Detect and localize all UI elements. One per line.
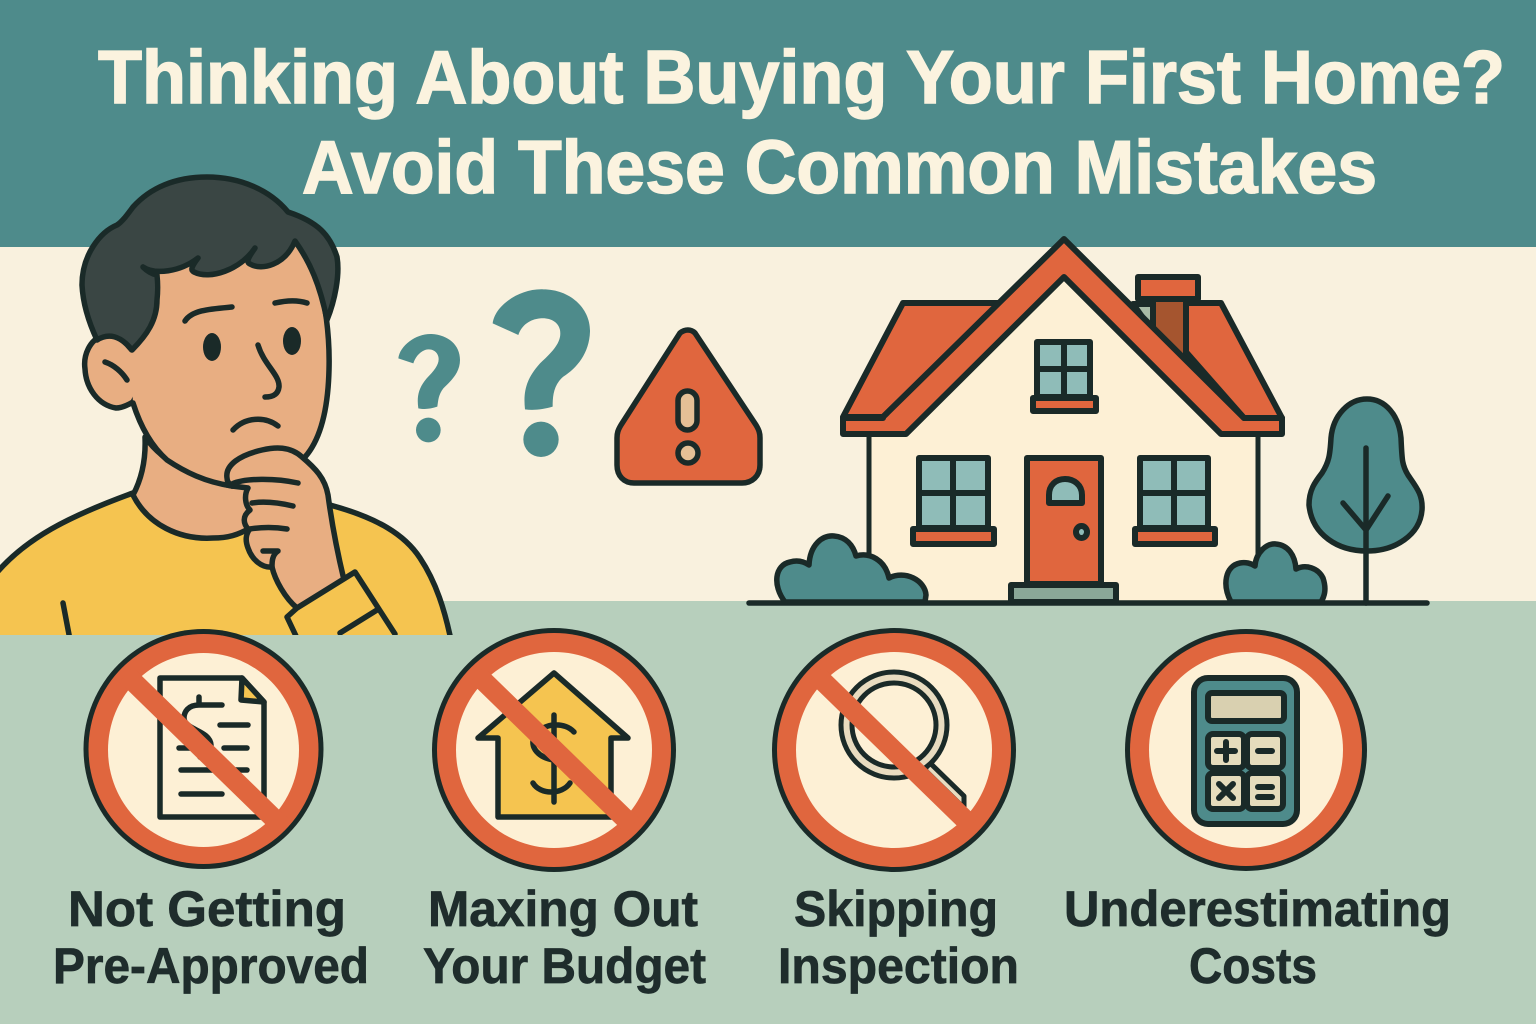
label: not getting pre-approved: Pre-Approved — [53, 938, 369, 994]
label: skipping inspection — [778, 881, 1019, 994]
prohibition slash — [126, 674, 281, 826]
person: hand — [227, 448, 344, 608]
illustration: left bush — [777, 536, 926, 602]
person: neck — [133, 437, 252, 538]
person: jaw and face outline — [131, 310, 332, 489]
house: left window — [913, 458, 994, 544]
house: wall — [869, 277, 1258, 601]
house: door — [1027, 458, 1101, 584]
person: nose — [258, 345, 279, 397]
house: main gable — [843, 239, 1282, 434]
magnifier icon — [841, 672, 964, 808]
house: chimney shadow patch — [1133, 304, 1153, 325]
icon: warning triangle — [617, 330, 760, 483]
calculator — [1194, 678, 1297, 824]
prohibition slash — [816, 674, 971, 826]
title — [98, 35, 1505, 209]
house: right window — [1135, 458, 1215, 544]
label: underestimating costs: Costs — [1189, 938, 1317, 994]
person: cuff lines — [287, 572, 395, 636]
house: chimney cap — [1138, 277, 1198, 299]
person: finger lines — [232, 479, 298, 567]
label: maxing out your budget — [423, 881, 706, 994]
icon: large question mark — [493, 289, 590, 457]
person: shirt outline — [0, 493, 452, 645]
panel: sage lower background — [0, 601, 1536, 1024]
prohibition slash — [477, 674, 632, 826]
person: face — [130, 245, 329, 486]
person: hair — [82, 177, 338, 350]
icon: no pre-approval document — [84, 629, 324, 869]
icon: no inspection magnifier — [772, 628, 1016, 872]
document icon — [160, 678, 264, 817]
label: underestimating costs: Underestimating — [1064, 881, 1451, 937]
house with dollar icon — [478, 673, 628, 817]
person: ear detail — [105, 362, 127, 380]
panel: cream scene background — [0, 247, 1536, 601]
panel: header band — [0, 0, 1536, 247]
label: skipping inspection: Inspection — [778, 938, 1019, 994]
illustration: ground line — [749, 600, 1427, 606]
person: mouth — [233, 419, 278, 430]
person: ear — [82, 338, 133, 411]
label: not getting pre-approved: Not Getting — [68, 881, 346, 937]
person: sleeve cuff — [298, 580, 347, 611]
house: door step — [1011, 585, 1116, 602]
illustration: worried person — [0, 177, 452, 645]
house: top window — [1033, 342, 1096, 411]
icon: calculator sign — [1125, 629, 1367, 871]
label: skipping inspection: Skipping — [794, 881, 998, 937]
icon: small question mark — [398, 334, 460, 442]
title: Avoid These Common Mistakes — [302, 125, 1377, 209]
house: chimney stack — [1153, 298, 1186, 366]
person: yellow shirt — [0, 493, 452, 645]
house: eave lines — [843, 415, 1282, 421]
house: right roof — [1186, 303, 1282, 418]
house: left roof — [843, 303, 1000, 417]
label: maxing out your budget: Maxing Out — [428, 881, 698, 937]
person: eyebrows — [185, 301, 307, 321]
illustration: right bush — [1226, 544, 1325, 602]
illustration: house — [843, 239, 1282, 602]
illustration: tree — [1309, 399, 1422, 603]
label: maxing out your budget: Your Budget — [423, 938, 706, 994]
title: Thinking About Buying Your First Home? — [98, 35, 1505, 119]
label: underestimating costs — [1064, 881, 1451, 994]
icon: no maxed-out budget house — [432, 628, 676, 872]
person: eyes — [203, 327, 301, 361]
label: not getting pre-approved — [53, 881, 369, 994]
house: wall edges — [869, 434, 1258, 560]
